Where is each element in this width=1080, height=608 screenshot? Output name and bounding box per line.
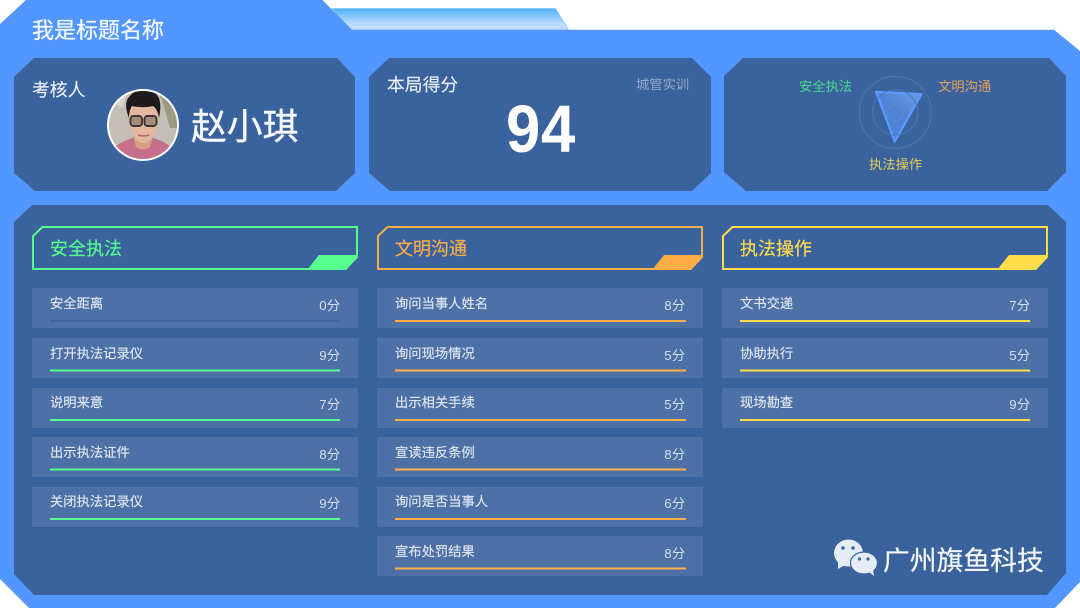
radar chart: [859, 76, 931, 148]
row: [722, 388, 1048, 428]
brand name: 广州旗鱼科技: [883, 546, 1044, 576]
radar label: safety: 安全执法: [799, 78, 852, 94]
column: operation: [722, 227, 1048, 428]
section header: communication: [378, 227, 703, 270]
row: 打开执法记录仪: [50, 346, 143, 361]
decorative tab behind the title: [332, 8, 568, 30]
assessor label: 考核人: [32, 80, 86, 100]
row: 询问当事人姓名: [395, 296, 488, 311]
row: 5分: [664, 348, 685, 363]
row: 7分: [1009, 298, 1030, 313]
row: 询问是否当事人: [395, 494, 488, 509]
row: [722, 288, 1048, 328]
row: 出示相关手续: [395, 395, 475, 410]
row: [377, 338, 703, 378]
panel: radar: [724, 58, 1066, 191]
row: 9分: [319, 496, 340, 511]
row: 询问现场情况: [395, 346, 475, 361]
row: 9分: [1009, 397, 1030, 412]
row: [32, 437, 358, 477]
row: 出示执法证件: [50, 445, 130, 460]
row: [32, 288, 358, 328]
radar label: operation: 执法操作: [869, 157, 922, 172]
section header: operation: 执法操作: [740, 239, 812, 259]
section header: operation: [723, 227, 1048, 270]
row: 安全距离: [50, 295, 103, 311]
row: 8分: [664, 298, 685, 313]
score value: 94: [506, 92, 575, 167]
panel: score: [369, 58, 711, 191]
watermark: [834, 540, 1044, 576]
section header: safety: [33, 227, 358, 270]
row: 协助执行: [740, 346, 793, 361]
scenario label: 城管实训: [636, 77, 689, 92]
panel: assessor: [14, 58, 355, 191]
row: 说明来意: [50, 394, 103, 410]
row: 现场勘查: [740, 395, 793, 410]
row: 5分: [1009, 348, 1030, 363]
row: 文书交递: [740, 295, 793, 311]
row: [377, 288, 703, 328]
section header: communication: 文明沟通: [395, 239, 467, 259]
row: 8分: [664, 447, 685, 462]
row: 5分: [664, 397, 685, 412]
row: 关闭执法记录仪: [50, 494, 143, 509]
row: [377, 536, 703, 576]
row: [377, 487, 703, 527]
panel: details: [14, 205, 1066, 595]
icon: wechat: [834, 540, 878, 576]
row: [32, 487, 358, 527]
row: 宣布处罚结果: [395, 544, 475, 559]
avatar: [107, 89, 179, 161]
row: 宣读违反条例: [395, 444, 475, 460]
title: 我是标题名称: [32, 18, 164, 43]
section header: safety: 安全执法: [50, 239, 122, 259]
row: [32, 388, 358, 428]
assessor name: 赵小琪: [191, 107, 298, 147]
row: [377, 437, 703, 477]
row: 0分: [319, 298, 340, 313]
column: safety: [32, 227, 358, 527]
row: 7分: [319, 397, 340, 412]
row: [377, 388, 703, 428]
radar label: communication: 文明沟通: [938, 79, 991, 94]
row: 6分: [664, 496, 685, 511]
score label: 本局得分: [387, 75, 458, 95]
row: 9分: [319, 348, 340, 363]
column: communication: [377, 227, 703, 576]
row: [32, 338, 358, 378]
row: [722, 338, 1048, 378]
row: 8分: [319, 447, 340, 462]
row: 8分: [664, 546, 685, 561]
